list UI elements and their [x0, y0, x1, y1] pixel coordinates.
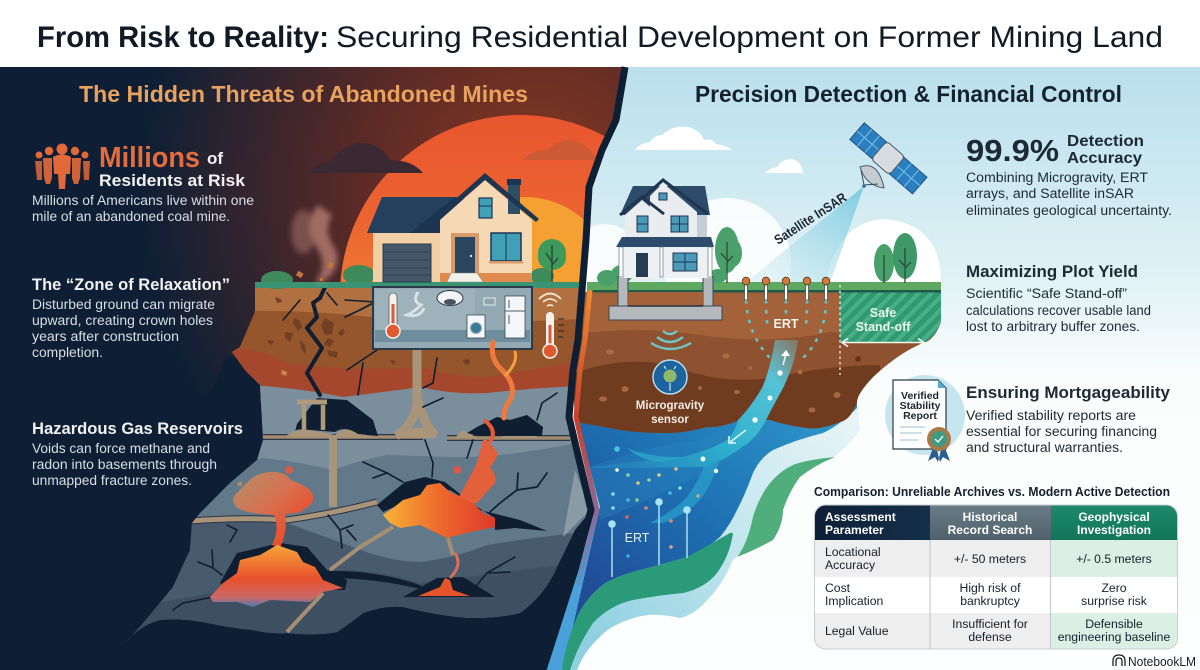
groundwater sensors: [608, 446, 700, 577]
text: mortgageability: essential for securing financing: [966, 424, 1157, 439]
safe stand-off zone: [840, 285, 941, 375]
table row: cost implication: [826, 583, 1147, 608]
text: zone of relaxation: years after construction: [32, 329, 179, 344]
heading: right: Precision Detection & Financial Control: [695, 81, 1122, 107]
title: Securing Residential Development on Former Mining Land: [336, 21, 1163, 54]
text: gas reservoirs: [32, 419, 243, 488]
text: gas reservoirs: Hazardous Gas Reservoirs: [32, 419, 243, 438]
icon: basement thermometer: [386, 293, 400, 338]
title: [37, 21, 1163, 54]
table row: locational accuracy: [814, 540, 1178, 577]
satellite beam: [745, 186, 864, 283]
table header row: Record Search: [948, 523, 1032, 537]
mine tunnels: [190, 349, 570, 632]
table header row: Assessment: [825, 510, 896, 524]
lava pool 1: [210, 545, 343, 607]
stat: detection accuracy: [966, 133, 1172, 218]
dark voids: [220, 398, 547, 600]
text: zone of relaxation: completion.: [32, 345, 103, 360]
title: From Risk to Reality:: [37, 21, 329, 54]
table row: legal value: [814, 613, 1178, 649]
ERT probes and signal paths: [742, 277, 830, 358]
icon: washer: [467, 315, 485, 338]
pale outer wave: [540, 403, 860, 670]
text: plot yield: Scientific “Safe Stand-off”: [966, 286, 1127, 301]
safe stand-off zone: Safe: [870, 306, 896, 320]
basement cutaway: [373, 287, 532, 349]
house: modern: [616, 180, 714, 281]
water light band: [590, 410, 800, 520]
soil layers: [570, 292, 950, 440]
text: millions description: Millions of Americans live within one: [32, 193, 254, 208]
microgravity sensor: [636, 331, 705, 426]
stat: detection accuracy: 99.9%: [966, 133, 1059, 168]
table header row: Investigation: [1077, 523, 1151, 537]
table header row: Historical: [963, 510, 1017, 524]
text: plot yield: Maximizing Plot Yield: [966, 263, 1138, 281]
text: mortgageability: [966, 384, 1171, 455]
trees: [597, 227, 917, 286]
text: millions description: mile of an abandoned coal mine.: [32, 209, 230, 224]
stat: millions: of: [207, 149, 223, 168]
text: plot yield: [966, 263, 1151, 334]
icon: stability report: Verified: [901, 390, 939, 402]
cracks: [173, 283, 557, 610]
icon: stability report: Report: [903, 410, 937, 422]
text: gas reservoirs: unmapped fracture zones.: [32, 473, 192, 488]
table row: cost implication: bankruptcy: [960, 594, 1021, 608]
scene: hills and clouds: [571, 127, 941, 326]
text: mortgageability: and structural warranties.: [966, 440, 1123, 455]
table row: legal value: defense: [968, 630, 1012, 644]
sun: [340, 115, 604, 282]
text: plot yield: lost to arbitrary buffer zones.: [966, 319, 1140, 334]
text: zone of relaxation: Disturbed ground can migrate: [32, 297, 215, 312]
satellite: [849, 122, 928, 195]
text: zone of relaxation: [32, 275, 230, 360]
green wave: [562, 533, 733, 670]
comparison table: [814, 505, 1178, 649]
table header row: Geophysical: [1078, 510, 1150, 524]
ERT probes and signal paths: ERT: [774, 317, 799, 331]
layered water: [570, 402, 857, 640]
microgravity sensor: Microgravity: [636, 400, 705, 412]
stat: millions: [99, 142, 246, 190]
safe stand-off zone: Stand-off: [856, 320, 911, 334]
ground grass line: [587, 282, 941, 290]
stat: millions: Residents at Risk: [99, 171, 246, 190]
timber frame: [297, 402, 327, 430]
stat: millions: Millions: [99, 142, 200, 174]
table header row: [814, 505, 1178, 540]
foundation: [609, 277, 722, 320]
text: gas reservoirs: radon into basements through: [32, 457, 217, 472]
lava pool 2 with flame: [383, 420, 498, 538]
stat: detection accuracy: eliminates geological uncertainty.: [966, 203, 1172, 218]
table row: cost implication: surprise risk: [1081, 594, 1148, 608]
text: plot yield: calculations recover usable land: [966, 303, 1151, 318]
icon: stability report: [885, 375, 965, 462]
icon: smoke detector: [437, 290, 463, 306]
groundwater sensors: ERT: [625, 531, 650, 545]
soil stones: [268, 297, 470, 365]
table row: cost implication: Cost: [825, 581, 851, 595]
table row: locational accuracy: +/- 50 meters: [954, 552, 1026, 566]
table row: cost implication: High risk of: [960, 581, 1021, 595]
blue left strip: [543, 510, 600, 670]
logo: NotebookLM: NotebookLM: [1128, 655, 1196, 669]
rubble: [285, 427, 540, 438]
stat: detection accuracy: Combining Microgravity, ERT: [966, 170, 1148, 185]
flames from basement: [492, 342, 516, 418]
icon: outdoor thermometer: [543, 312, 564, 358]
small lava pool: [418, 553, 470, 596]
icon: people group: [35, 144, 90, 189]
debris: [296, 261, 334, 281]
house: suburban: [367, 173, 539, 282]
smoke: [291, 205, 337, 282]
label: Satellite InSAR: Satellite InSAR: [771, 190, 849, 248]
microgravity sensor: sensor: [651, 414, 689, 426]
clouds: [308, 143, 423, 173]
stat: detection accuracy: Accuracy: [1067, 150, 1142, 167]
panel: right detection side: [530, 67, 1200, 670]
tree: [538, 239, 566, 282]
stat: detection accuracy: arrays, and Satellite inSAR: [966, 186, 1134, 201]
text: mortgageability: Verified stability reports are: [966, 408, 1136, 423]
stat: detection accuracy: Detection: [1067, 133, 1144, 150]
table row: legal value: engineering baseline: [1058, 630, 1170, 644]
text: zone of relaxation: The “Zone of Relaxation”: [32, 275, 230, 294]
icon: wifi signal: [539, 294, 561, 306]
text: millions description: [32, 193, 254, 224]
green tail: [737, 457, 835, 557]
table row: legal value: Defensible: [1085, 617, 1143, 631]
table row: legal value: Legal Value: [825, 624, 889, 638]
heading: left: The Hidden Threats of Abandoned Mines: [79, 81, 528, 107]
table row: cost implication: Implication: [825, 594, 883, 608]
panel: left threats side: [0, 67, 622, 670]
table row: locational accuracy: Accuracy: [825, 558, 876, 572]
table header row: Parameter: [825, 523, 884, 537]
stream rising through ground: [590, 340, 798, 523]
icon: fridge: [505, 296, 525, 338]
gas cloud: [233, 466, 313, 548]
text: mortgageability: Ensuring Mortgageability: [966, 384, 1171, 402]
divider: [543, 67, 625, 670]
ground layers: [126, 288, 588, 642]
text: zone of relaxation: upward, creating crown holes: [32, 313, 213, 328]
icon: stability report: Stability: [900, 400, 941, 412]
heading: comparison: Comparison: Unreliable Archives vs. Modern Active Detection: [814, 485, 1170, 499]
ground cover: [261, 265, 554, 289]
ground grass: [255, 282, 590, 288]
text: gas reservoirs: Voids can force methane and: [32, 441, 210, 456]
table row: legal value: Insufficient for: [952, 617, 1028, 631]
table row: cost implication: Zero: [1101, 581, 1127, 595]
table row: locational accuracy: +/- 0.5 meters: [1076, 552, 1152, 566]
table row: locational accuracy: Locational: [825, 545, 881, 559]
